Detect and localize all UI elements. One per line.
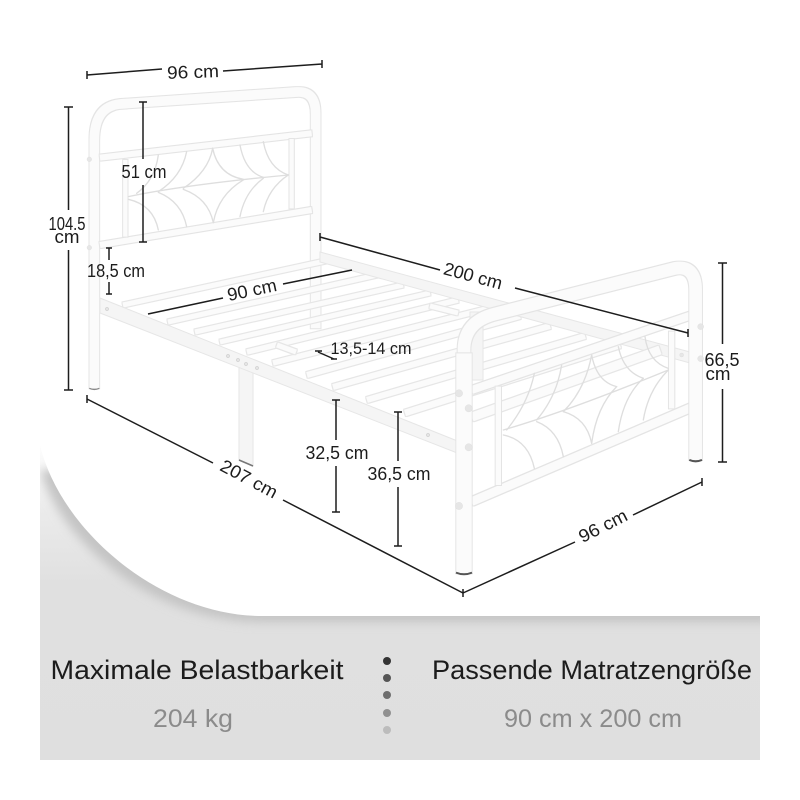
foot end cross bar (472, 350, 660, 417)
dimension: headboard width 96 cm: 96 cm (167, 61, 219, 83)
dimension: footboard height 66,5 cm (704, 263, 740, 462)
far centre leg (470, 312, 483, 380)
spec: maximum load (50, 655, 344, 733)
near side rail (100, 298, 470, 458)
far side rail (320, 252, 690, 363)
footboard bolts (455, 324, 704, 574)
headboard rails (100, 133, 312, 245)
dimension: frame height 36,5 cm: 36,5 cm (368, 464, 430, 484)
dimension: total length 207 cm: 207 cm (217, 456, 281, 502)
dimension: total length 207 cm (87, 395, 463, 593)
dimension: side length 200 cm: 200 cm (441, 259, 505, 293)
dimension: clearance 18,5 cm: 18,5 cm (87, 261, 145, 281)
dimension: slat width 90 cm: 90 cm (225, 275, 279, 305)
slats (123, 260, 620, 413)
headboard bolts (87, 157, 99, 389)
spec: maximum load: 204 kg (153, 705, 233, 733)
dimension: footboard height 66,5 cm: 66,5 (704, 350, 740, 370)
dimension: headboard height 51 cm (122, 102, 166, 242)
dimension: side length 200 cm (320, 233, 688, 337)
spec: suitable mattress size: 90 cm x 200 cm (504, 705, 682, 733)
dimension: footboard width 96 cm: 96 cm (575, 505, 631, 547)
dimension: frame height 32,5 cm: 32,5 cm (306, 443, 368, 463)
near rail bolts (106, 308, 430, 436)
headboard (87, 92, 316, 389)
dimension: total height 104.5 cm (48, 107, 86, 390)
panel: grey background with curved white cut-out (40, 440, 770, 760)
spider web ornament on footboard (503, 337, 668, 468)
footboard rails and bars (472, 314, 695, 502)
spec: suitable mattress size (432, 655, 752, 733)
centre leg (239, 367, 253, 466)
divider dots (383, 657, 391, 734)
dimension: slat gap 13,5-14 cm: 13,5-14 cm (330, 339, 412, 358)
dimension: total height 104.5 cm: cm (54, 227, 80, 247)
dimension: footboard height 66,5 cm: cm (706, 364, 730, 384)
spec: suitable mattress size: Passende Matratzengröße (432, 655, 752, 685)
headboard frame tube (94, 92, 316, 388)
footboard arch and posts (464, 268, 696, 573)
dimension: headboard height 51 cm: 51 cm (122, 162, 166, 182)
dimension: slat width 90 cm (148, 270, 352, 314)
spec: maximum load: Maximale Belastbarkeit (50, 655, 344, 685)
dimension: total height 104.5 cm: 104.5 (48, 214, 86, 234)
footboard (455, 268, 704, 574)
dimension: frame height 32,5 cm (306, 400, 368, 512)
dimension: frame height 36,5 cm (368, 412, 430, 546)
dimension: footboard width 96 cm (463, 478, 702, 597)
dimension: clearance 18,5 cm (87, 248, 145, 294)
spider web ornament on headboard (128, 142, 288, 230)
dimension: headboard width 96 cm (87, 60, 322, 83)
